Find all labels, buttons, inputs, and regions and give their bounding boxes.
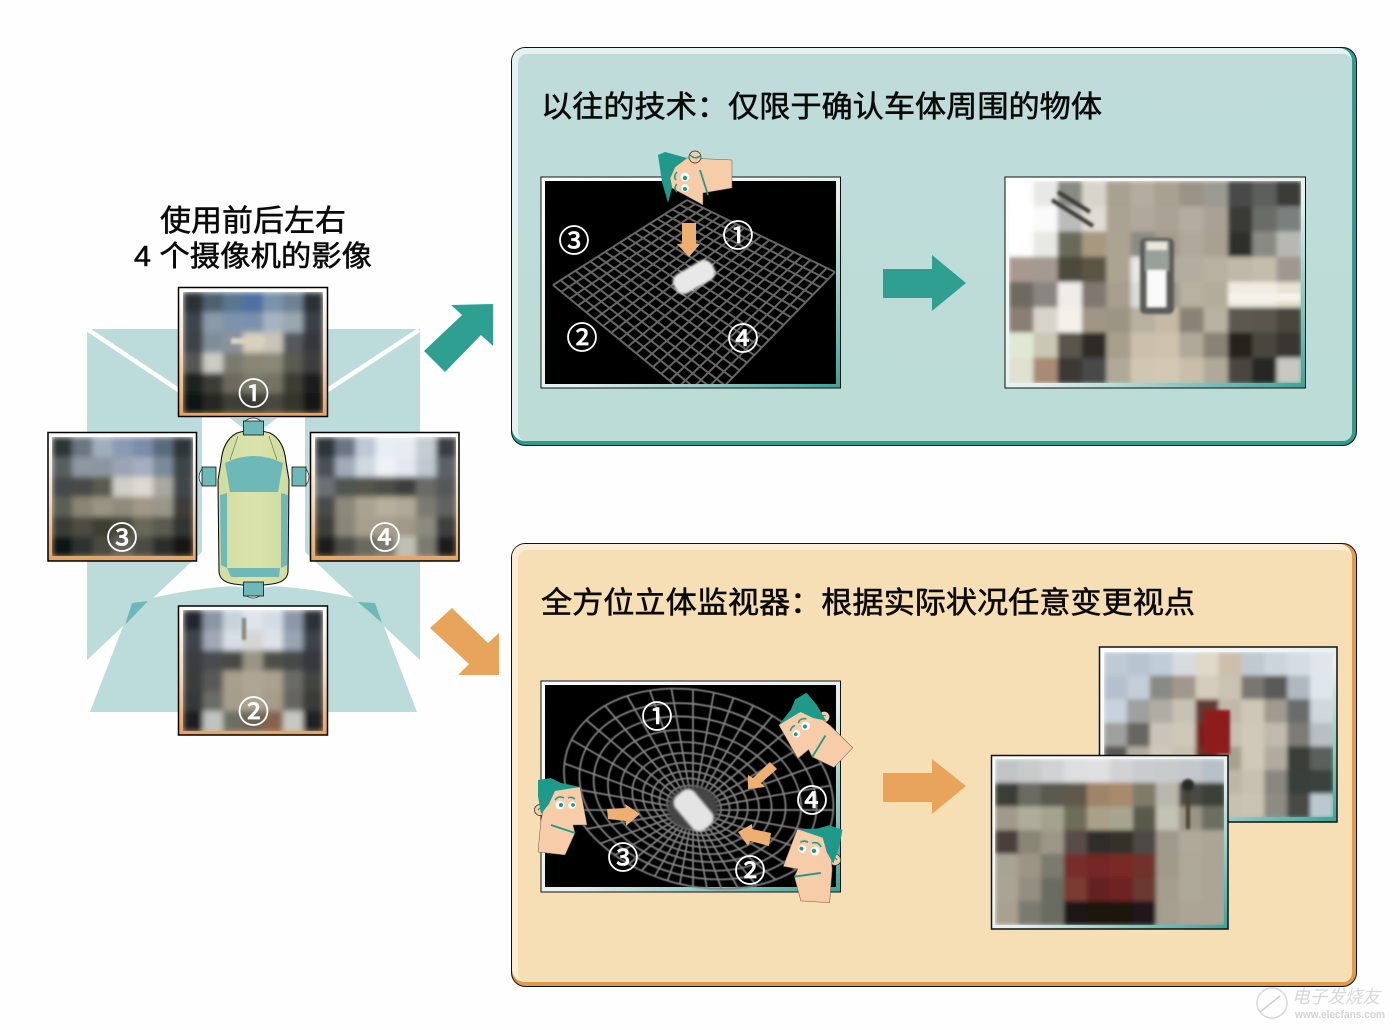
- car top view with camera mounts: [199, 418, 309, 598]
- viewer face left: [534, 778, 587, 855]
- number 2: ②: [238, 687, 269, 732]
- viewer face above grid: [658, 151, 732, 205]
- monitor: flat grid view: [541, 177, 840, 408]
- number 2: ②: [566, 313, 598, 358]
- number 4: ④: [370, 513, 400, 558]
- number 4: ④: [728, 314, 758, 359]
- watermark: elecfans: 电子发烧友: [1292, 987, 1382, 1007]
- parked car seen from above: [1140, 238, 1174, 314]
- title: four camera images: [134, 205, 372, 273]
- result image: rear high view: [1100, 647, 1337, 822]
- number 4: ④: [796, 776, 828, 821]
- camera mount front: [244, 418, 264, 435]
- result image: driver-eye view: [992, 756, 1228, 929]
- camera mount right: [292, 467, 309, 486]
- heading: all-around monitor: 全方位立体监视器：根据实际状况任意变更视点: [541, 587, 1195, 620]
- arrow: teal toward conventional panel: [424, 304, 493, 372]
- result image: top-down view: [1005, 177, 1306, 388]
- car model: [670, 785, 717, 835]
- camera image 3: left: [48, 432, 196, 561]
- heading: conventional: 以往的技术：仅限于确认车体周围的物体: [541, 91, 1102, 124]
- bowl projection grid: [562, 687, 835, 890]
- viewer face lower right: [778, 819, 846, 906]
- number 1: ①: [722, 211, 754, 256]
- camera view coverage fields: [87, 329, 420, 712]
- small arrow: from lower-right viewer: [738, 824, 771, 846]
- number 3: ③: [608, 833, 638, 878]
- number 1: ①: [642, 692, 672, 737]
- small arrow: from upper-right viewer: [748, 762, 777, 789]
- car model: [669, 256, 719, 298]
- title: four camera images: 使用前后左右: [160, 205, 346, 238]
- viewer face upper right: [768, 689, 857, 782]
- number 3: ③: [558, 216, 590, 261]
- small arrow: view down: [677, 223, 700, 257]
- flat projection grid: [552, 199, 836, 384]
- camera image 1: front: [178, 288, 328, 416]
- camera mount rear: [244, 582, 264, 598]
- camera image 2: rear: [178, 606, 328, 735]
- camera mount left: [199, 467, 216, 486]
- number 2: ②: [734, 846, 766, 891]
- title: four camera images: 4 个摄像机的影像: [134, 240, 372, 273]
- arrow: orange result: [883, 759, 966, 814]
- camera image 4: right: [310, 432, 459, 561]
- number 1: ①: [238, 369, 269, 414]
- small arrow: from left viewer: [607, 804, 640, 826]
- arrow: orange toward new panel: [430, 608, 499, 675]
- monitor: bowl grid view: [540, 680, 841, 892]
- arrow: teal result: [883, 255, 966, 311]
- watermark: elecfans: www.elecfans.com: [1294, 1009, 1385, 1021]
- watermark: elecfans: [1257, 987, 1385, 1021]
- panel: conventional technology: [512, 48, 1356, 446]
- number 3: ③: [106, 513, 138, 558]
- panel: all-around stereoscopic monitor: [493, 544, 1356, 1010]
